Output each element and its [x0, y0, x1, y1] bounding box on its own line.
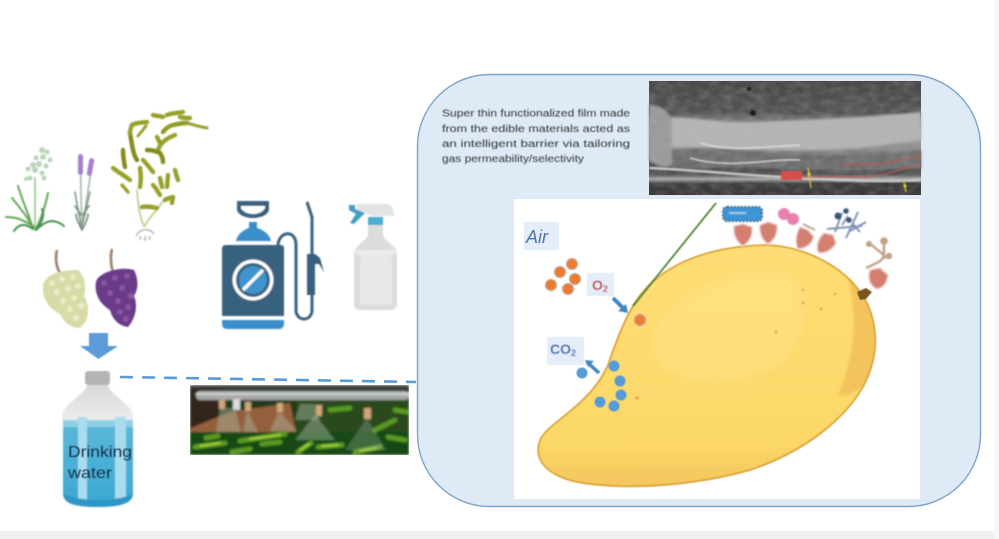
label: CO2: CO [550, 341, 571, 357]
label: O2: O [592, 277, 603, 293]
panel: film barrier [418, 74, 980, 506]
panel: mango diagram [514, 199, 920, 499]
text: film description: from the edible materials acted as [442, 124, 630, 135]
pink spores [778, 208, 799, 225]
icon: plants [6, 112, 207, 241]
image: film micrograph [649, 81, 921, 195]
arrow: carbon dioxide out [585, 360, 599, 373]
label: Air [524, 222, 559, 250]
blue mould [827, 208, 866, 238]
icon: mango [538, 245, 890, 486]
text: film description: an intelligent barrier via tailoring [442, 139, 630, 150]
label: O2 [587, 273, 614, 296]
text: film description: Super thin functionalized film made [442, 108, 631, 120]
icon: purple grapes [96, 249, 137, 327]
film line [633, 203, 716, 306]
carbon dioxide molecules [576, 360, 626, 412]
text: Drinking water: water [67, 465, 113, 482]
icon: seaweed [113, 112, 207, 241]
icon: white grapes [43, 250, 88, 328]
text: film description [442, 108, 631, 165]
text: Drinking water: Drinking [68, 444, 132, 461]
icon: spray bottle [349, 204, 397, 310]
dashed connector line [120, 377, 416, 382]
icons: microbes and shields [723, 207, 892, 289]
image: vegetables under spray nozzles [190, 385, 409, 455]
text: film description: gas permeability/selectivity [442, 154, 584, 165]
bacterium [723, 207, 762, 221]
icon: backpack sprayer [222, 201, 324, 329]
oxygen molecules [546, 258, 646, 326]
text: Drinking water [67, 444, 132, 482]
shields [734, 222, 888, 289]
icon: water bottle [62, 371, 133, 507]
bar particle [803, 224, 815, 230]
arrow: down to water [80, 333, 118, 359]
brown fungus [866, 237, 892, 268]
icon: grass plant [6, 147, 64, 231]
label: Air: Air [525, 227, 549, 247]
label: CO2: 2 [571, 348, 576, 358]
arrow: oxygen in [613, 298, 628, 313]
label: O2: 2 [603, 284, 608, 294]
icon: lavender [75, 154, 95, 230]
label: CO2 [547, 337, 584, 365]
